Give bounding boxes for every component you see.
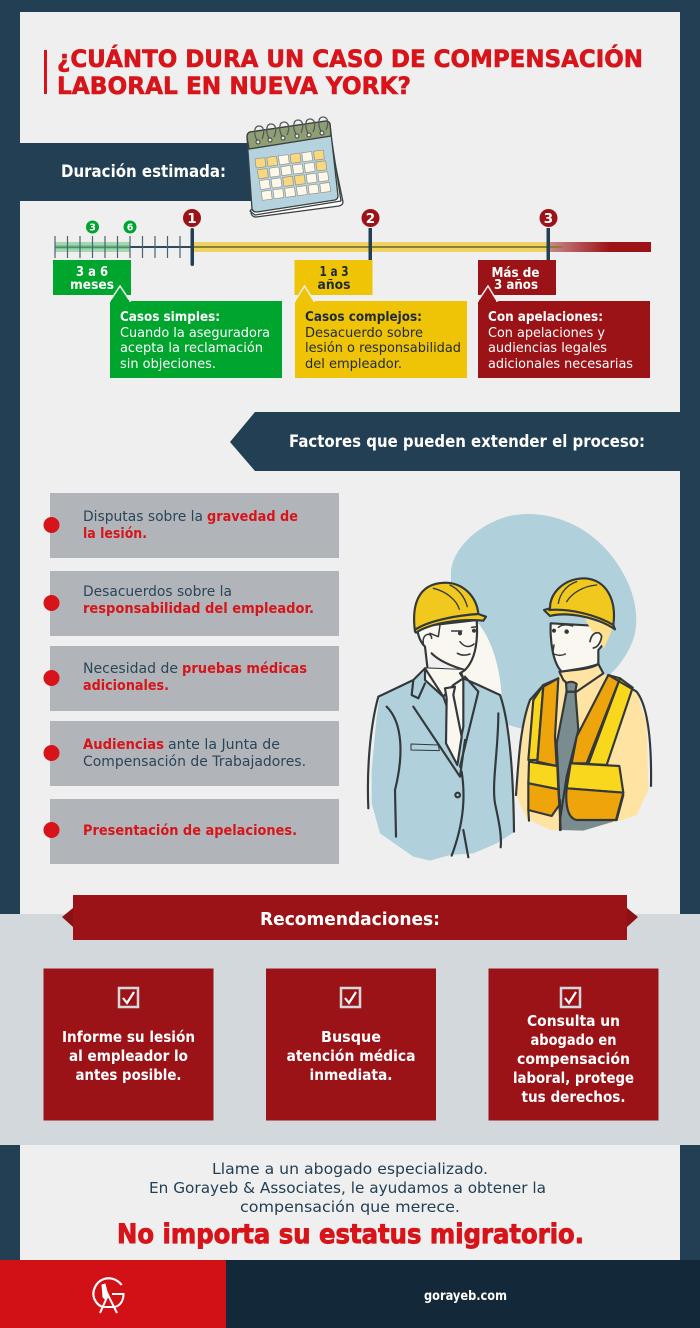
label: 1 a 3 años: años [318,277,350,293]
closing text: Llame a un abogado especializado. [212,1160,488,1178]
factor 2: responsabilidad del empleador. [83,601,314,617]
card: con apelaciones: audiencias legales [488,341,607,356]
marker 3 months: 3 [89,222,96,234]
card: con apelaciones: adicionales necesarias [488,357,633,372]
card: casos simples: sin objeciones. [120,357,216,372]
factor 3 [44,646,339,711]
factor 1: la lesión. [83,526,147,542]
card: casos simples: Casos simples: [120,310,220,325]
card: con apelaciones: Con apelaciones: [488,310,603,325]
marker 1 [183,209,201,227]
recommendation card 2 [266,968,436,1120]
label: más de 3 años: 3 años [494,277,538,293]
illustration: two men with hard hats [368,514,651,861]
factor 3: pruebas médicas [182,661,307,677]
card: casos complejos: Desacuerdo sobre [305,326,423,341]
factor 3: adicionales. [83,678,169,694]
factor 4: Audiencias [83,737,164,753]
recommendation card 2: Busque [321,1028,381,1046]
card: casos complejos: lesión o responsabilidad [305,340,461,356]
recommendation card 3: compensación [517,1050,630,1068]
factor 1: Disputas sobre la [83,509,203,525]
card: casos complejos: del empleador. [305,357,402,372]
factor 1: gravedad de [207,509,298,525]
recommendation card 2: inmediata. [310,1066,392,1084]
factor 4 [44,721,339,786]
factor 5 [44,799,339,864]
recommendations banner [62,895,638,940]
marker 3 months [86,220,99,234]
factor 1 [44,493,339,558]
marker 1: 1 [187,211,197,227]
factor 4: Compensación de Trabajadores. [83,754,306,770]
closing text: compensación que merece. [240,1198,460,1216]
card: con apelaciones: Con apelaciones y [488,326,605,341]
card: con apelaciones [478,286,650,378]
recommendation card 3: Consulta un [527,1012,620,1030]
recommendation card 1: antes posible. [76,1066,182,1084]
recommendations banner: Recomendaciones: [260,909,440,930]
label: 1 a 3 años: 1 a 3 [320,264,348,280]
heading band: factores [230,412,700,471]
marker 2: 2 [366,211,375,227]
card: casos complejos [295,286,467,378]
timeline [55,209,651,266]
label: más de 3 años [478,260,556,295]
recommendations section [0,914,700,1145]
factor 4: ante la Junta de [168,737,280,753]
card: casos complejos: Casos complejos: [305,310,422,325]
footer [0,1260,700,1328]
icon: checkbox 1 [119,988,138,1007]
recommendation card 1 [44,968,214,1120]
label: 1 a 3 años [294,260,372,295]
title [44,43,643,100]
card: casos simples: Cuando la aseguradora [120,326,270,341]
label: 3 a 6 meses [53,260,131,295]
title: LABORAL EN NUEVA YORK? [57,72,411,100]
recommendation card 1: Informe su lesión [62,1028,195,1046]
factor 2 [44,571,339,636]
factor 3: Necesidad de [83,661,178,677]
closing text [149,1160,546,1216]
recommendation card 3: laboral, protege [513,1069,634,1087]
recommendation card 3: tus derechos. [522,1088,626,1106]
icon: calendar [247,117,343,217]
logo [93,1278,124,1313]
label: 3 a 6 meses: 3 a 6 [76,264,108,280]
factor 2: Desacuerdos sobre la [83,584,232,600]
factor 5: Presentación de apelaciones. [83,823,297,839]
label: 3 a 6 meses: meses [70,277,114,293]
icon: checkbox 3 [561,988,580,1007]
recommendation card 3 [488,968,658,1120]
heading band: duración estimada: Duración estimada: [61,162,226,182]
recommendation card 1: al empleador lo [69,1047,188,1065]
icon: checkbox 2 [341,988,360,1007]
marker 3: 3 [544,211,553,227]
closing slogan: No importa su estatus migratorio. [117,1219,584,1250]
marker 6 months [124,220,136,234]
label: más de 3 años: Más de [492,265,540,281]
heading band: factores: Factores que pueden extender el proceso: [289,432,645,452]
title: ¿CUÁNTO DURA UN CASO DE COMPENSACIÓN [57,43,643,73]
recommendation card 3: abogado en [530,1031,616,1049]
marker 6 months: 6 [127,222,134,234]
card: casos simples: acepta la reclamación [120,340,263,356]
heading band: duración estimada [0,143,252,201]
recommendation card 2: atención médica [286,1047,416,1065]
marker 3 [540,209,558,227]
card: casos simples [110,286,282,378]
marker 2 [362,209,380,227]
footer: gorayeb.com [424,1289,507,1304]
closing text: En Gorayeb & Associates, le ayudamos a obtener la [149,1179,546,1197]
